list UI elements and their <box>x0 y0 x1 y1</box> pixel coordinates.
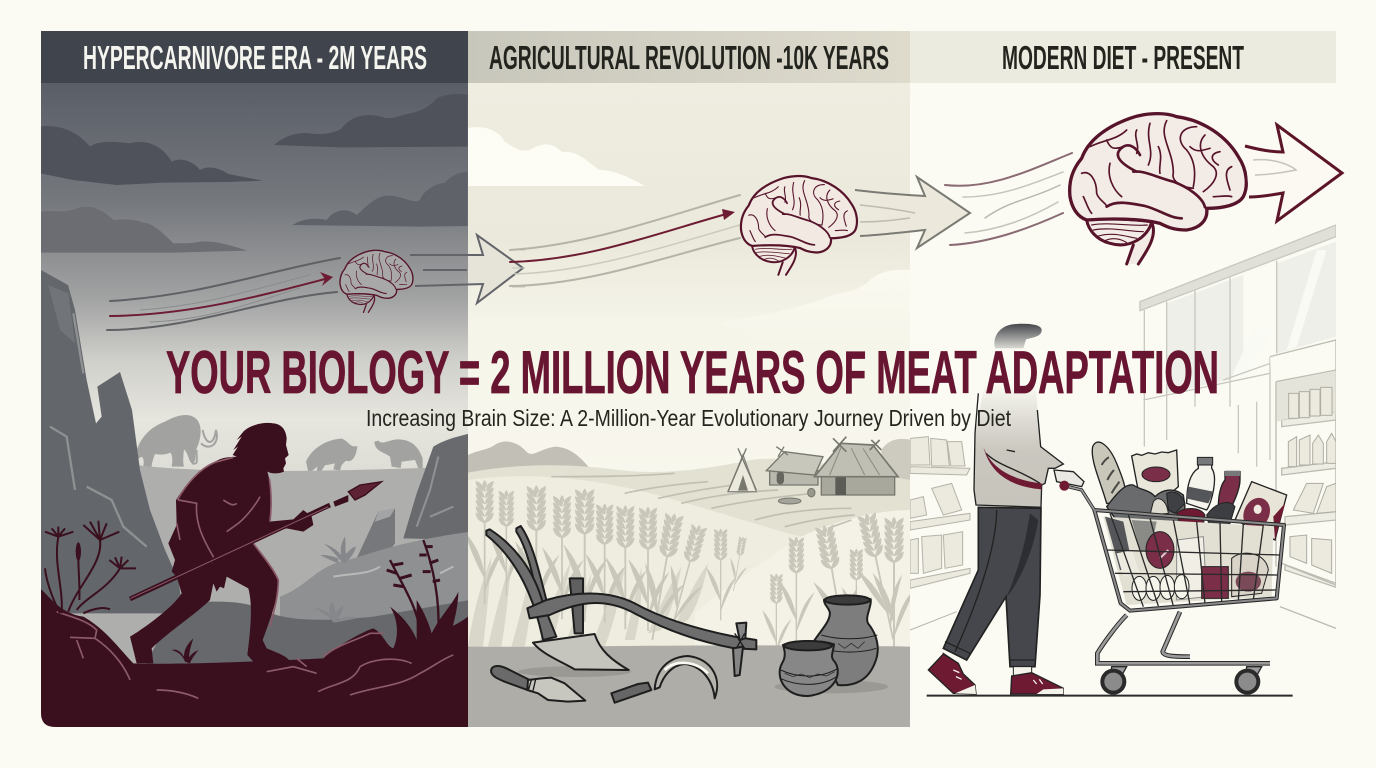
juice bottle <box>1218 472 1240 513</box>
subtitle: Increasing Brain Size: A 2-Million-Year Evolutionary Journey Driven by Diet <box>366 405 1012 431</box>
foreground ground <box>40 588 470 730</box>
hand <box>1054 470 1084 487</box>
brain growth path <box>107 114 1342 330</box>
heading: era 2: AGRICULTURAL REVOLUTION -10K YEARS <box>489 39 889 76</box>
basket wires <box>1107 513 1280 607</box>
clouds: pale <box>468 127 645 186</box>
arrowhead: era two flow <box>722 209 735 220</box>
store window <box>1167 242 1336 393</box>
illustration: hunter landscape <box>40 270 470 730</box>
header band: agricultural revolution <box>468 31 910 83</box>
trousers <box>943 507 1041 667</box>
tool: plough <box>486 526 756 676</box>
meat package <box>1235 482 1287 540</box>
ground line <box>926 694 1293 697</box>
arrow: onward <box>1245 125 1342 221</box>
header band: hypercarnivore era <box>41 31 468 83</box>
basket frame <box>1094 510 1284 611</box>
grass tufts <box>312 537 357 623</box>
middle ground hill <box>280 532 468 620</box>
panel: modern diet <box>910 224 1336 697</box>
far trees <box>468 442 588 473</box>
arrow: era one to two <box>410 235 525 303</box>
apple and dark veg <box>1177 509 1205 535</box>
hair <box>994 324 1042 348</box>
brain: small <box>340 250 413 312</box>
tool: sickle <box>611 656 717 703</box>
panel: hypercarnivore era <box>40 31 470 730</box>
socks <box>943 653 1032 678</box>
arrow: era two to three <box>855 177 970 248</box>
illustration: farm scene <box>465 437 917 730</box>
rolling fields <box>468 458 910 536</box>
shoes <box>928 654 976 694</box>
header band: modern diet <box>910 31 1336 83</box>
ground <box>468 645 911 730</box>
sweater <box>974 383 1063 507</box>
far hill <box>71 465 426 664</box>
left cliff <box>40 270 183 613</box>
dwellings: tipi and huts <box>728 437 898 504</box>
wheels <box>1110 667 1262 682</box>
shopping cart with groceries <box>1059 442 1287 693</box>
clouds: dark storm clouds <box>40 94 468 253</box>
brain: medium <box>741 176 857 275</box>
handle <box>1064 486 1094 510</box>
brain: large <box>1070 114 1246 264</box>
pots <box>780 595 878 696</box>
illustration: supermarket <box>910 225 1336 696</box>
figure: shopper <box>928 324 1084 694</box>
dark mound <box>145 600 468 664</box>
animals: mammoth, bison and ox <box>135 415 423 472</box>
right shelving <box>1270 340 1336 628</box>
furrows <box>551 473 855 528</box>
undercarriage <box>1097 612 1270 663</box>
plants: left umbels <box>45 521 136 613</box>
figure: hunter with spear <box>130 423 382 663</box>
milk bottle <box>1187 458 1214 510</box>
leaf mass <box>468 557 708 647</box>
arrowhead: era one flow <box>320 272 333 286</box>
left shelving <box>910 437 970 630</box>
cart contents <box>1103 517 1273 605</box>
right rocks <box>357 508 395 558</box>
flow lines: era three <box>945 153 1072 245</box>
heading: era 1: HYPERCARNIVORE ERA - 2M YEARS <box>83 39 427 76</box>
flow lines: era two <box>510 195 740 286</box>
panel: agricultural revolution <box>465 31 917 730</box>
small grass <box>172 638 198 663</box>
ground cracks <box>57 612 453 698</box>
chips bag <box>1132 450 1178 500</box>
flow lines: era one <box>107 258 340 330</box>
greens <box>1107 485 1185 537</box>
baguette <box>1092 442 1125 503</box>
tool: stone knife <box>491 666 585 702</box>
spear <box>130 505 330 599</box>
plants: right spiky <box>390 592 458 648</box>
wheat stalks <box>465 480 917 661</box>
